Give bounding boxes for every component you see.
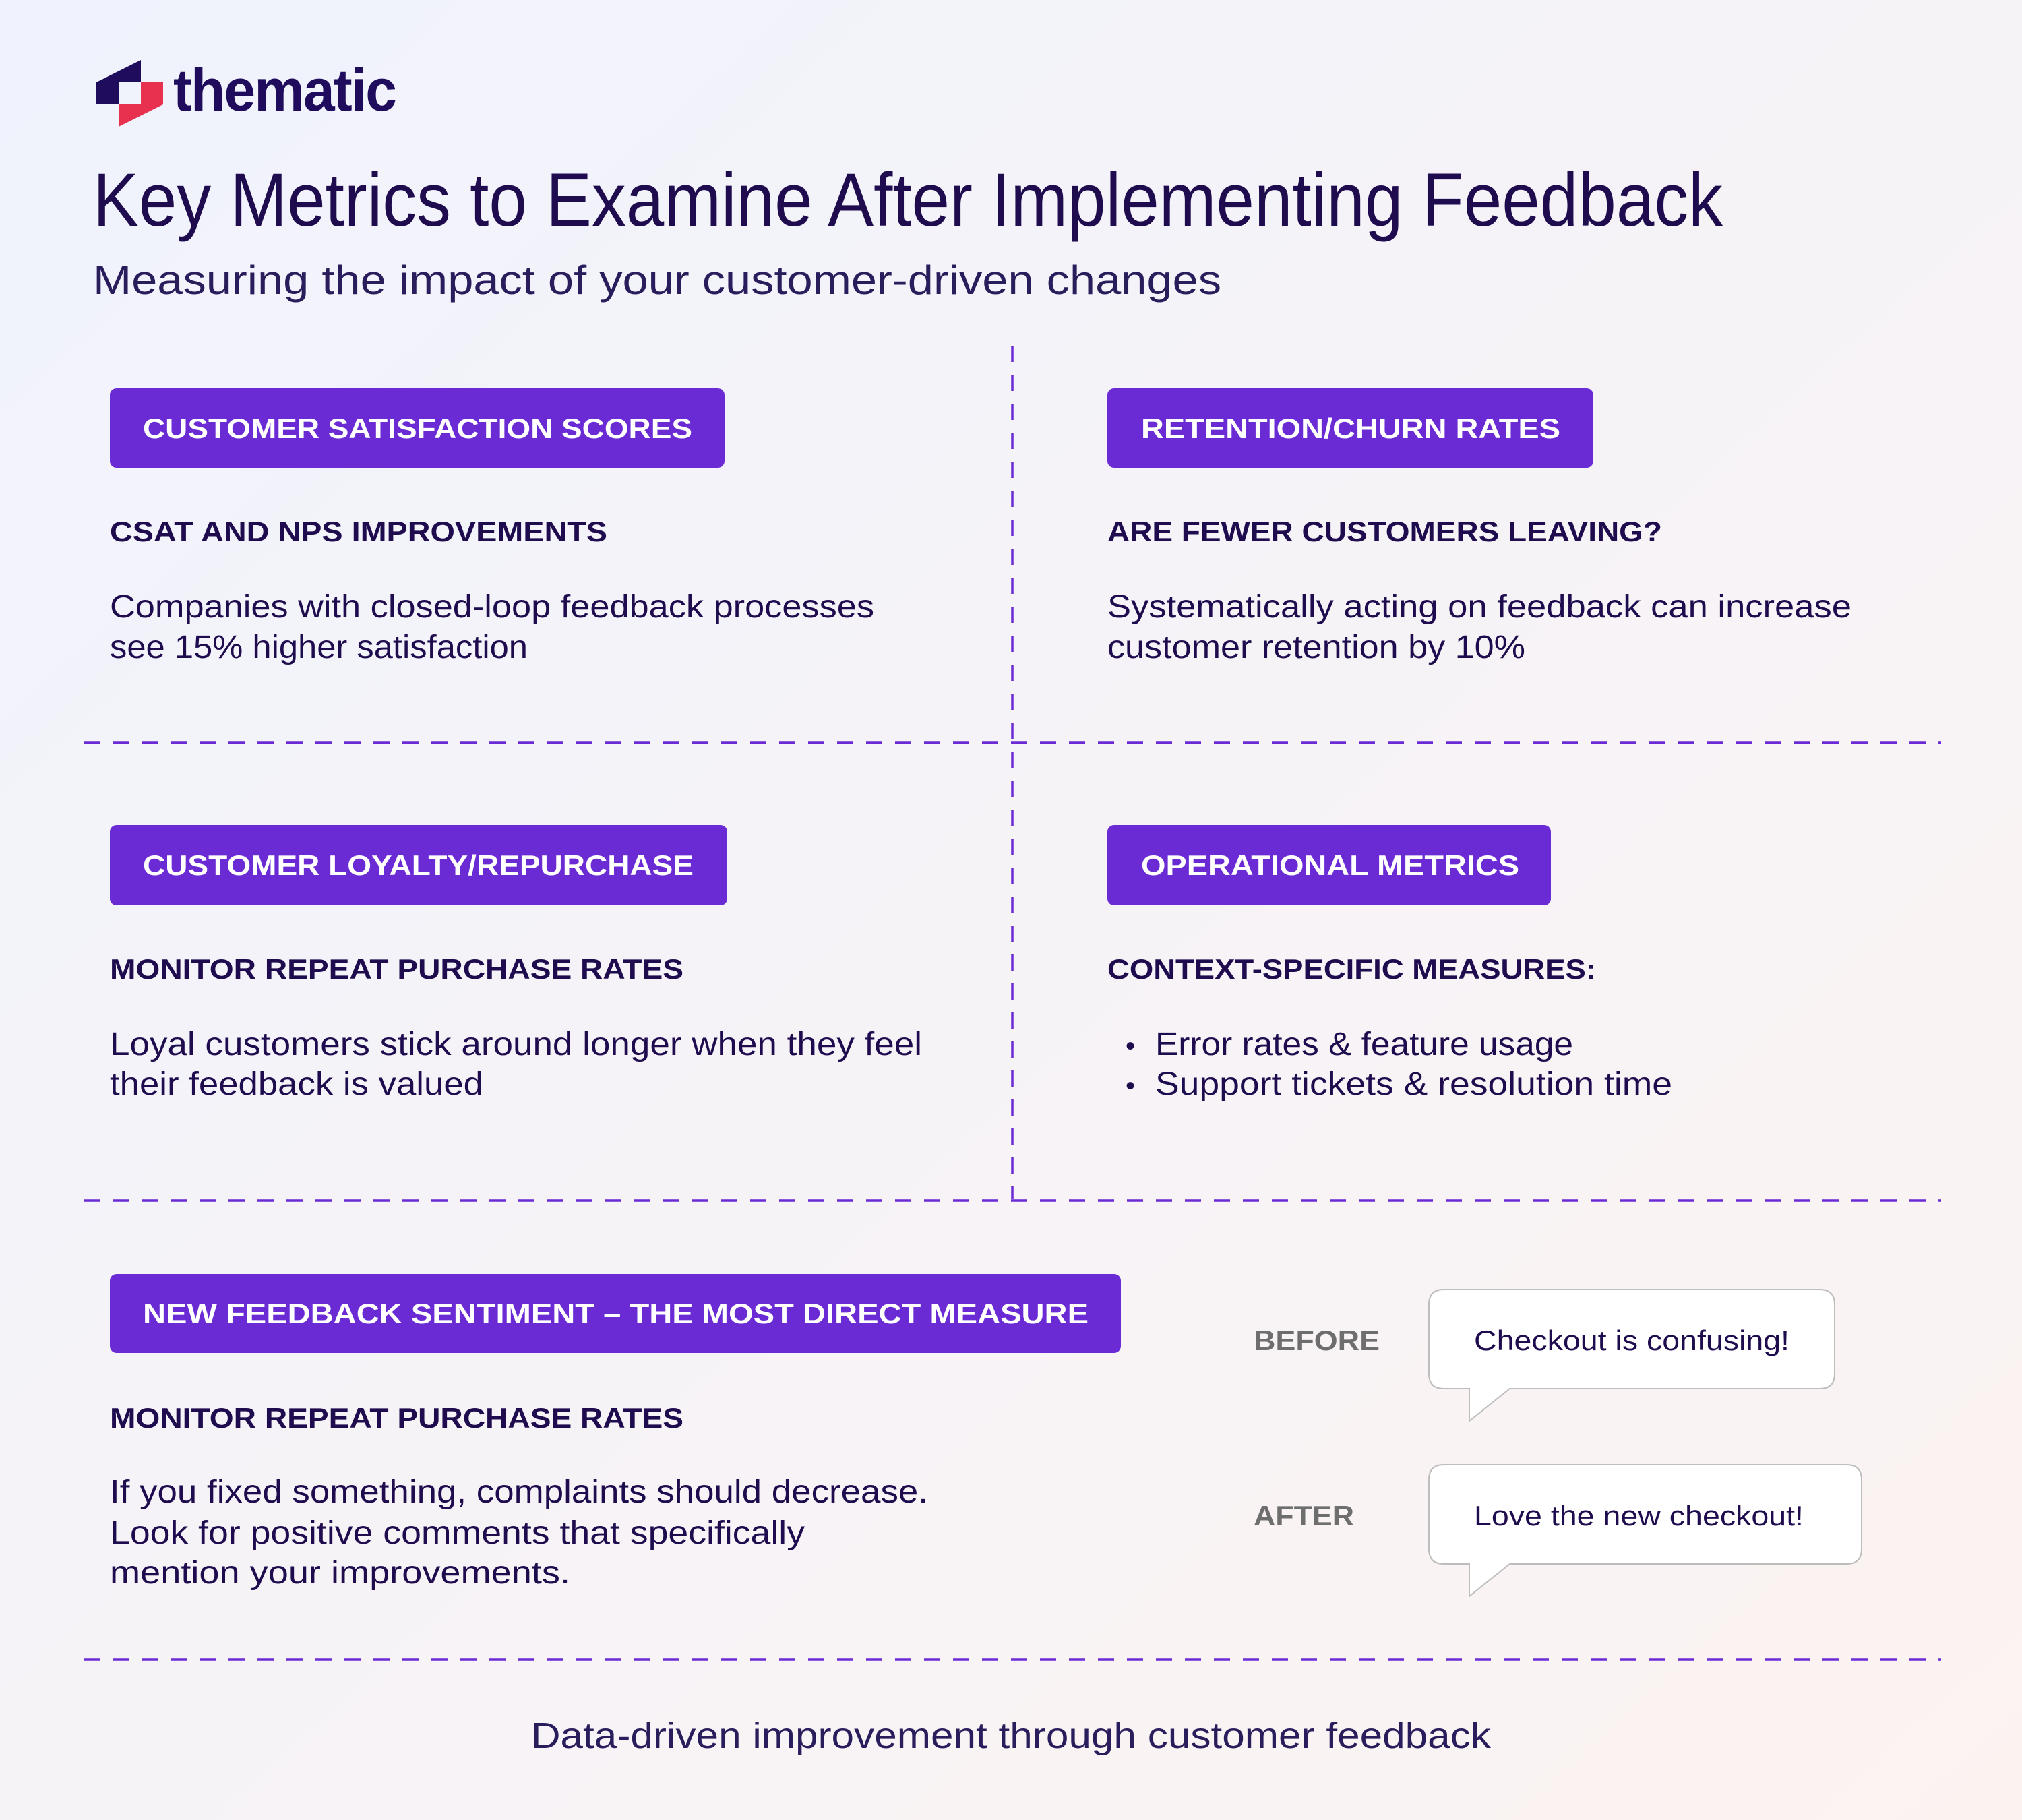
panel: operational [1107,825,1672,1102]
panel: customer satisfaction: see 15% higher satisfaction [110,630,528,665]
callout: before: BEFORE [1254,1325,1380,1356]
callout: after: Love the new checkout! [1474,1500,1804,1531]
logo: thematic [173,57,396,123]
callout: before [1254,1290,1835,1421]
panel: loyalty: Loyal customers stick around longer when they feel [110,1027,922,1062]
panel: customer satisfaction: CUSTOMER SATISFACTION SCORES [143,413,692,444]
panel: sentiment: MONITOR REPEAT PURCHASE RATES [110,1402,683,1434]
panel: loyalty: their feedback is valued [110,1066,483,1102]
panel: operational: OPERATIONAL METRICS [1141,849,1519,881]
title: Key Metrics to Examine After Implementing Feedback [93,158,1723,242]
footer: Data-driven improvement through customer feedback [531,1716,1492,1756]
logo [96,57,396,127]
panel: sentiment: Look for positive comments that specifically [110,1515,805,1551]
callout: after [1254,1465,1862,1596]
panel: loyalty: CUSTOMER LOYALTY/REPURCHASE [143,849,694,881]
panel: retention: RETENTION/CHURN RATES [1141,413,1560,444]
panel: sentiment: NEW FEEDBACK SENTIMENT – THE MOST DIRECT MEASURE [143,1298,1089,1329]
panel: customer satisfaction: CSAT AND NPS IMPROVEMENTS [110,516,607,547]
panel: operational: Support tickets & resolution time [1155,1066,1672,1102]
panel: retention [1107,388,1851,665]
panel: operational: CONTEXT-SPECIFIC MEASURES: [1107,953,1596,985]
callout: before: Checkout is confusing! [1474,1325,1789,1356]
panel: retention: Systematically acting on feedback can increase [1107,589,1851,625]
panel: operational: • [1126,1031,1135,1061]
panel: customer satisfaction: Companies with closed-loop feedback processes [110,589,874,625]
panel: operational: Error rates & feature usage [1155,1027,1573,1062]
panel: sentiment: If you fixed something, complaints should decrease. [110,1474,928,1510]
panel: operational: • [1126,1071,1135,1101]
panel: retention: customer retention by 10% [1107,630,1525,665]
panel: retention: ARE FEWER CUSTOMERS LEAVING? [1107,516,1662,547]
panel: loyalty: MONITOR REPEAT PURCHASE RATES [110,953,683,985]
subtitle: Measuring the impact of your customer-driven changes [93,257,1221,303]
panel: sentiment [110,1274,1121,1591]
panel: customer satisfaction [110,388,874,665]
panel: sentiment: mention your improvements. [110,1555,570,1591]
callout: after: AFTER [1254,1500,1354,1531]
panel: loyalty [110,825,922,1102]
